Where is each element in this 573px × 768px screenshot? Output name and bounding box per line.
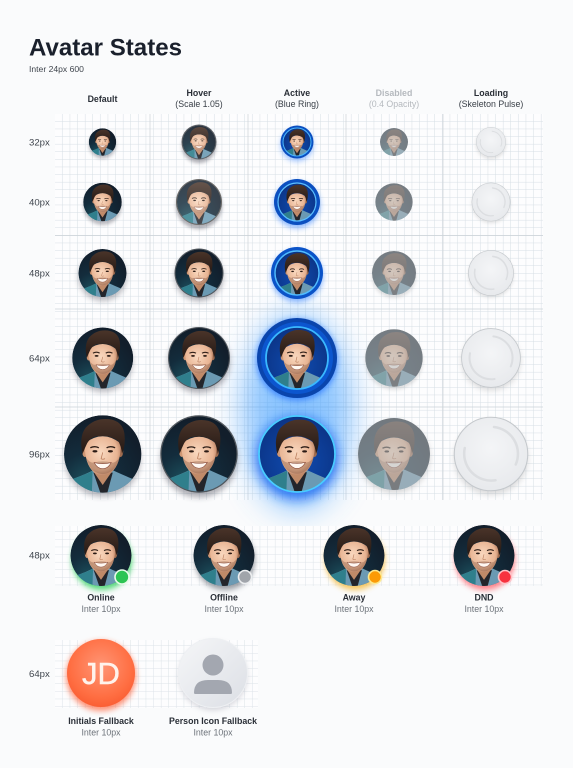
row size labels: 96px: [29, 450, 50, 460]
row size labels: 64px: [29, 669, 50, 680]
status: offline label: [204, 592, 244, 614]
column headers: Loading: [474, 88, 508, 98]
status: dnd label: DND: [474, 592, 494, 602]
column headers: Disabled: [376, 88, 412, 98]
fallback: initials avatar: JD: [82, 656, 120, 691]
avatar: disabled 40: [375, 183, 413, 221]
status: dnd label: Inter 10px: [464, 604, 504, 614]
active column glow: [243, 314, 351, 510]
avatar: active 64: [256, 318, 338, 401]
fallback: person icon label: Inter 10px: [193, 728, 233, 738]
fallback: initials label: [68, 716, 134, 738]
avatar: active 40: [274, 179, 320, 228]
row size labels: 32px: [29, 138, 50, 148]
column headers: Hover: [187, 88, 212, 98]
status: dnd label: [464, 592, 504, 614]
status: dnd: [454, 525, 515, 590]
row size labels: 48px: [29, 550, 50, 562]
avatar: disabled 96: [358, 418, 430, 493]
avatar: hover 48: [174, 248, 224, 301]
status: offline label: Inter 10px: [204, 604, 244, 614]
column headers: [88, 88, 523, 109]
row size labels: 48px: [29, 268, 50, 280]
avatar: disabled 48: [372, 251, 416, 298]
column headers: (Skeleton Pulse): [459, 99, 523, 109]
subtitle: Inter 24px 600: [29, 64, 84, 74]
status: away label: Inter 10px: [334, 604, 374, 614]
avatar: hover 64: [168, 327, 230, 393]
fallback: person icon avatar: [178, 638, 248, 710]
avatar: active 96: [256, 416, 338, 499]
grid: status row: [55, 526, 543, 586]
avatar: hover 96: [160, 415, 238, 498]
status: offline: [194, 525, 255, 590]
avatar: default 40: [83, 183, 122, 225]
column headers: Active: [284, 88, 310, 98]
avatar: hover 32: [182, 124, 216, 163]
fallback: initials avatar: [66, 639, 136, 711]
column headers: (Blue Ring): [275, 99, 319, 109]
avatar: disabled 64: [365, 329, 423, 390]
fallback: initials label: Initials Fallback: [68, 716, 134, 726]
row size labels: [29, 138, 50, 680]
status: online: [70, 525, 132, 590]
grid: states matrix: [55, 114, 543, 500]
avatar: active 48: [271, 247, 323, 302]
row size labels: 40px: [29, 198, 50, 208]
status: away: [324, 525, 385, 590]
avatar: default 48: [78, 249, 126, 301]
avatar: default 32: [89, 128, 116, 158]
status: offline label: Offline: [210, 592, 238, 602]
status: online label: Inter 10px: [81, 604, 121, 614]
column headers: (Scale 1.05): [175, 99, 223, 109]
skeleton: loading 32: [476, 127, 506, 159]
avatar: default 64: [72, 328, 133, 392]
skeleton: loading 48: [468, 250, 514, 298]
fallback: person icon label: [169, 716, 257, 738]
row size labels: 64px: [29, 354, 50, 364]
fallback: person icon label: Person Icon Fallback: [169, 716, 257, 726]
grid: fallback row: [55, 640, 258, 708]
status: online label: Online: [87, 592, 115, 602]
skeleton: loading 40: [472, 183, 510, 223]
avatar: disabled 32: [380, 128, 408, 156]
status: away label: Away: [343, 592, 366, 602]
skeleton: loading 96: [454, 417, 528, 495]
fallback: initials label: Inter 10px: [81, 728, 121, 738]
status: away label: [334, 592, 374, 614]
title: Avatar States: [29, 34, 182, 62]
skeleton: loading 64: [462, 329, 520, 390]
status: online label: [81, 592, 121, 614]
avatar: default 96: [64, 415, 141, 497]
column headers: Default: [88, 94, 117, 104]
avatar: hover 40: [176, 179, 222, 229]
column headers: (0.4 Opacity): [369, 99, 419, 109]
avatar: active 32: [280, 126, 314, 161]
